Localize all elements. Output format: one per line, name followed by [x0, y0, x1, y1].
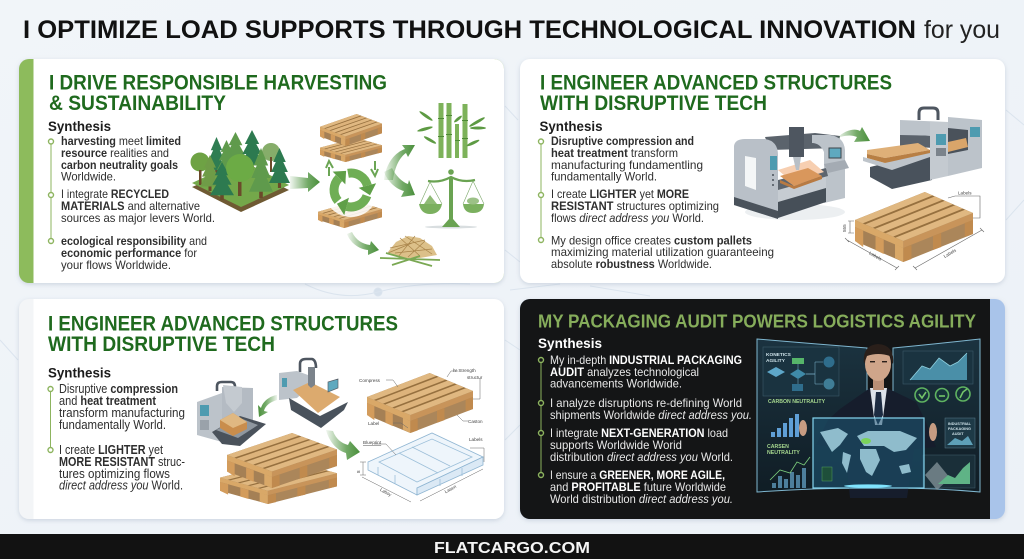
line chart: lower left	[770, 457, 810, 488]
panel: advanced structures top	[520, 59, 1005, 283]
bullet list: advancements Worldwide.	[550, 376, 682, 390]
bullet list: I ensure a GREENER, MORE AGILE,	[550, 468, 725, 482]
heading: harvesting: & SUSTAINABILITY	[49, 92, 226, 115]
bullet list	[61, 134, 215, 272]
bullet list: MATERIALS and alternative	[61, 199, 200, 213]
heading: harvesting: I DRIVE RESPONSIBLE HARVESTING	[49, 72, 387, 94]
icon: pallet with dimensions: Labels	[943, 247, 958, 259]
arrow: to bamboo	[384, 145, 415, 180]
mini panel: packaging audit: AUDIT	[952, 432, 964, 436]
bullet list: I integrate RECYCLED	[61, 187, 169, 201]
icon: forest	[190, 130, 290, 212]
bullet list: Disruptive compression and	[551, 134, 694, 148]
arrow: machine to press	[837, 127, 870, 142]
title: I OPTIMIZE LOAD SUPPORTS THROUGH TECHNOLOGICAL INNOVATION	[23, 16, 916, 44]
label: carsen neutrality: NEUTRALITY	[767, 450, 800, 456]
bullet list: Disruptive compression	[59, 381, 178, 396]
icon: labelled pallet	[359, 368, 483, 433]
icon: stacked pallets large	[220, 433, 337, 504]
bullet list: carbon neutrality goals	[61, 158, 178, 172]
heading: audit: MY PACKAGING AUDIT POWERS LOGISTICS AGILITY	[538, 310, 977, 332]
timeline markers	[48, 386, 53, 452]
label: carsen neutrality	[767, 444, 800, 456]
bar chart: left	[771, 414, 799, 437]
icon: CNC machine	[734, 127, 849, 220]
icon: labelled pallet: Compress	[359, 378, 381, 383]
bullet list: supports Worldwide Worid	[550, 438, 682, 452]
icon: press machine	[863, 108, 982, 189]
bullet list: direct address you World.	[59, 478, 183, 492]
bullet list: sources as major levers World.	[61, 211, 215, 225]
icon: blueprint pallet: Blueprint	[363, 440, 382, 445]
bullet list: distribution direct address you World.	[550, 450, 733, 464]
bullet list: your flows Worldwide.	[61, 258, 171, 272]
bullet list: flows direct address you World.	[551, 211, 704, 225]
bullet list	[550, 353, 752, 506]
bullet list: and PROFITABLE future Worldwide	[550, 480, 726, 494]
timeline markers	[538, 139, 544, 242]
icon: labelled pallet: Caston	[468, 419, 483, 424]
icon: pallet with dimensions: 555	[842, 224, 847, 232]
timeline markers	[48, 139, 54, 244]
icon: blueprint pallet	[356, 433, 484, 502]
panel: packaging audit	[520, 299, 1005, 519]
mini panel: packaging audit: INDUSTRIAL	[948, 422, 972, 426]
footer: FLATCARGO.COM	[434, 540, 590, 557]
mini panel: packaging audit	[945, 418, 975, 448]
bullet list: and heat treatment	[59, 393, 157, 408]
person in suit	[799, 344, 937, 498]
flow diagram: KONETICS	[766, 352, 792, 358]
bullet list: My design office creates custom pallets	[551, 234, 752, 248]
subheading: synthesis: Synthesis	[538, 335, 602, 351]
icon: blueprint pallet: 8	[356, 470, 361, 473]
footer	[0, 534, 1024, 559]
icon: balance scales	[419, 169, 484, 228]
bullet list: transform manufacturing	[59, 405, 185, 420]
bullet list: RESISTANT structures optimizing	[551, 199, 719, 213]
label: carsen neutrality: CARSEN	[767, 444, 789, 450]
heading: structures: I ENGINEER ADVANCED STRUCTURES	[540, 72, 892, 94]
holographic dashboard	[757, 339, 980, 498]
area chart: upper right	[903, 351, 973, 384]
arrow: to fibres	[347, 232, 379, 255]
subheading: synthesis: Synthesis	[48, 118, 111, 134]
title: for you	[924, 16, 1000, 44]
bullet list: I integrate NEXT-GENERATION load	[550, 426, 728, 440]
icon: stacked pallets	[318, 114, 382, 228]
icon: wood fibres and bamboo stalks	[380, 236, 440, 266]
heading: structures: I ENGINEER ADVANCED STRUCTURES	[48, 312, 398, 336]
bullet list: Worldwide.	[61, 170, 116, 184]
icon: blueprint pallet: Labsy	[379, 487, 393, 498]
icon: left press machine	[197, 382, 266, 446]
bullet list: heat treatment transform	[551, 146, 678, 160]
icon: labelled pallet: Label	[368, 421, 379, 426]
bullet list: manufacturing fundamentling	[551, 158, 703, 172]
bullet list: MORE RESISTANT struc-	[59, 454, 185, 469]
subheading: synthesis: Synthesis	[540, 118, 603, 134]
timeline markers	[538, 358, 544, 478]
bullet list: I analyze disruptions re-defining World	[550, 396, 742, 410]
icon: recycling symbol	[324, 161, 378, 220]
bullet list	[59, 381, 185, 492]
icon: blueprint pallet: Labels	[469, 437, 483, 442]
bullet list: AUDIT analyzes technological	[550, 365, 699, 379]
arrow: forest to recycling	[290, 172, 320, 192]
icon: labelled pallet: hr Strength	[453, 368, 476, 373]
panel: advanced structures bottom	[19, 299, 504, 519]
label: carbon neutrality: CARBON NEUTRALITY	[768, 399, 826, 405]
icon: labelled pallet: structur	[467, 375, 483, 380]
icon: bamboo	[417, 103, 486, 158]
bullet list: economic performance for	[61, 246, 197, 260]
arrow: right machine to left machine	[258, 395, 277, 417]
icon: pallet with dimensions: Labels	[958, 190, 972, 196]
bullet list: I create LIGHTER yet MORE	[551, 187, 689, 201]
bullet list: My in-depth INDUSTRIAL PACKAGING	[550, 353, 742, 367]
arrow: to scales	[384, 168, 415, 197]
bullet list: fundamentally World.	[551, 170, 657, 184]
icon: blueprint pallet: Lasen	[444, 484, 457, 494]
bullet list: tures optimizing flows	[59, 466, 170, 481]
bullet list: resource realities and	[61, 146, 169, 160]
bullet list: I create LIGHTER yet	[59, 442, 163, 457]
bullet list: fundamentally World.	[59, 417, 166, 432]
heading: structures	[540, 72, 892, 115]
heading: structures: WITH DISRUPTIVE TECH	[48, 333, 275, 356]
bullet list: harvesting meet limited	[61, 134, 181, 148]
status circles	[915, 387, 970, 402]
flow diagram	[763, 347, 839, 396]
panel: responsible harvesting	[19, 59, 504, 283]
icon: right CNC machine	[279, 359, 348, 428]
icon: pallet with dimensions	[842, 190, 984, 270]
world map panel	[813, 418, 924, 488]
bullet list	[551, 134, 774, 271]
icon: pallet with dimensions: Labels	[868, 251, 883, 262]
arrow: to blueprint	[326, 430, 360, 460]
subheading: synthesis: Synthesis	[48, 364, 111, 380]
heading: structures	[48, 312, 398, 356]
bullet list: World distribution direct address you.	[550, 492, 733, 506]
bullet list: maximizing material utilization guaranteeing	[551, 245, 774, 259]
bullet list: shipments Worldwide direct address you.	[550, 408, 752, 422]
mini panel: packaging audit: PACKAGING	[948, 427, 971, 431]
flow diagram: AGILITY	[766, 358, 786, 364]
heading: structures: WITH DISRUPTIVE TECH	[540, 92, 767, 115]
bullet list: ecological responsibility and	[61, 234, 207, 248]
heading: harvesting	[49, 72, 387, 115]
bullet list: absolute robustness Worldwide.	[551, 257, 712, 271]
area chart: lower right	[923, 455, 975, 490]
